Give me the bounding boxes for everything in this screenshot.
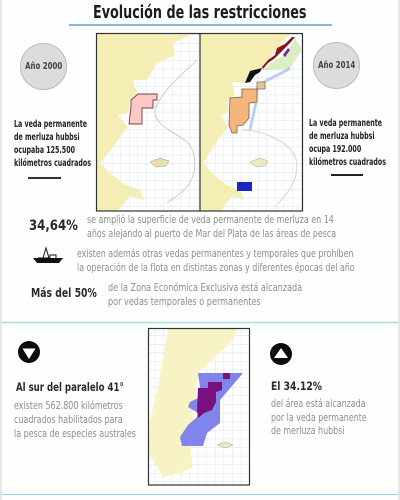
icon: up triangle bbox=[270, 343, 292, 365]
Malvinas islands bbox=[150, 158, 169, 167]
text: stat 1: años alejando al puerto de Mar del Plata de las áreas de pesca bbox=[87, 229, 336, 240]
text: south: existen 562.800 kilómetros bbox=[14, 401, 123, 412]
purple zone bbox=[283, 48, 290, 57]
text: stat 3 bbox=[108, 282, 302, 308]
text: south: cuadrados habilitados para bbox=[14, 415, 123, 426]
black zone bbox=[245, 68, 262, 83]
badge: 2000 bbox=[20, 43, 67, 90]
stat: más del 50%: Más del 50% bbox=[31, 285, 97, 300]
light blue strip bbox=[250, 68, 290, 130]
title: Evolución de las restricciones bbox=[93, 3, 307, 23]
text: 2014 area: kilómetros cuadrados bbox=[309, 157, 386, 168]
text: stat 1: se amplió la superficie de veda permanente de merluza en 14 bbox=[87, 215, 334, 226]
dash right bbox=[331, 174, 363, 176]
text: 34.12: de merluza hubbsi bbox=[271, 426, 345, 437]
dash left bbox=[28, 177, 61, 179]
map panel: 2000 bbox=[96, 33, 200, 211]
title underline bbox=[69, 24, 332, 26]
text: 2000 area: kilómetros cuadrados bbox=[14, 158, 91, 169]
text: 34.12 bbox=[271, 398, 367, 437]
text: 2000 area bbox=[14, 119, 91, 169]
green zone bbox=[263, 38, 302, 70]
text: 34.12: por la veda permanente bbox=[271, 413, 367, 424]
section divider bbox=[2, 322, 398, 324]
dark red zone bbox=[262, 37, 295, 69]
badge: 2014 bbox=[313, 42, 360, 89]
map panel: 2014 bbox=[200, 33, 303, 211]
text: other closures: la operación de la flota en distintas zonas y diferentes épocas del año bbox=[77, 263, 355, 274]
map: hake zone bbox=[148, 328, 250, 485]
text: south bbox=[14, 400, 136, 440]
icon: down triangle bbox=[18, 341, 40, 363]
badge: 2014: Año 2014 bbox=[318, 60, 355, 71]
text: south: la pesca de especies australes bbox=[14, 429, 136, 440]
badge: 2000: Año 2000 bbox=[25, 61, 62, 72]
text: stat 1 bbox=[87, 214, 336, 240]
text: stat 3: por vedas temporales o permanentes bbox=[108, 297, 261, 308]
text: 2014 area: La veda permanente bbox=[309, 118, 382, 129]
text: other closures bbox=[77, 248, 355, 274]
tan square bbox=[257, 82, 265, 89]
text: stat 3: de la Zona Económica Exclusiva está alcanzada bbox=[108, 283, 302, 294]
text: 2000 area: La veda permanente bbox=[14, 119, 87, 130]
bottom divider bbox=[2, 494, 398, 496]
map borders bbox=[96, 33, 302, 211]
icon: ship bbox=[33, 248, 63, 263]
heading: south of 41: Al sur del paralelo 41° bbox=[16, 380, 124, 394]
closed area 2000 bbox=[129, 94, 157, 124]
stat: 34,64%: 34,64% bbox=[29, 218, 78, 234]
orange closure bbox=[229, 89, 257, 133]
text: 2014 area bbox=[309, 118, 386, 168]
text: 34.12: del área está alcanzada bbox=[271, 399, 366, 410]
blue rectangle bbox=[237, 182, 252, 191]
text: 2000 area: de merluza hubbsi bbox=[14, 132, 80, 143]
text: other closures: existen además otras vedas permanentes y temporales que prohíben bbox=[77, 249, 353, 260]
text: 2000 area: ocupaba 125.500 bbox=[14, 145, 75, 156]
text: 2014 area: ocupa 192.000 bbox=[309, 144, 361, 155]
text: 2014 area: de merluza hubbsi bbox=[309, 131, 375, 142]
heading: 34.12: El 34.12% bbox=[271, 379, 322, 393]
